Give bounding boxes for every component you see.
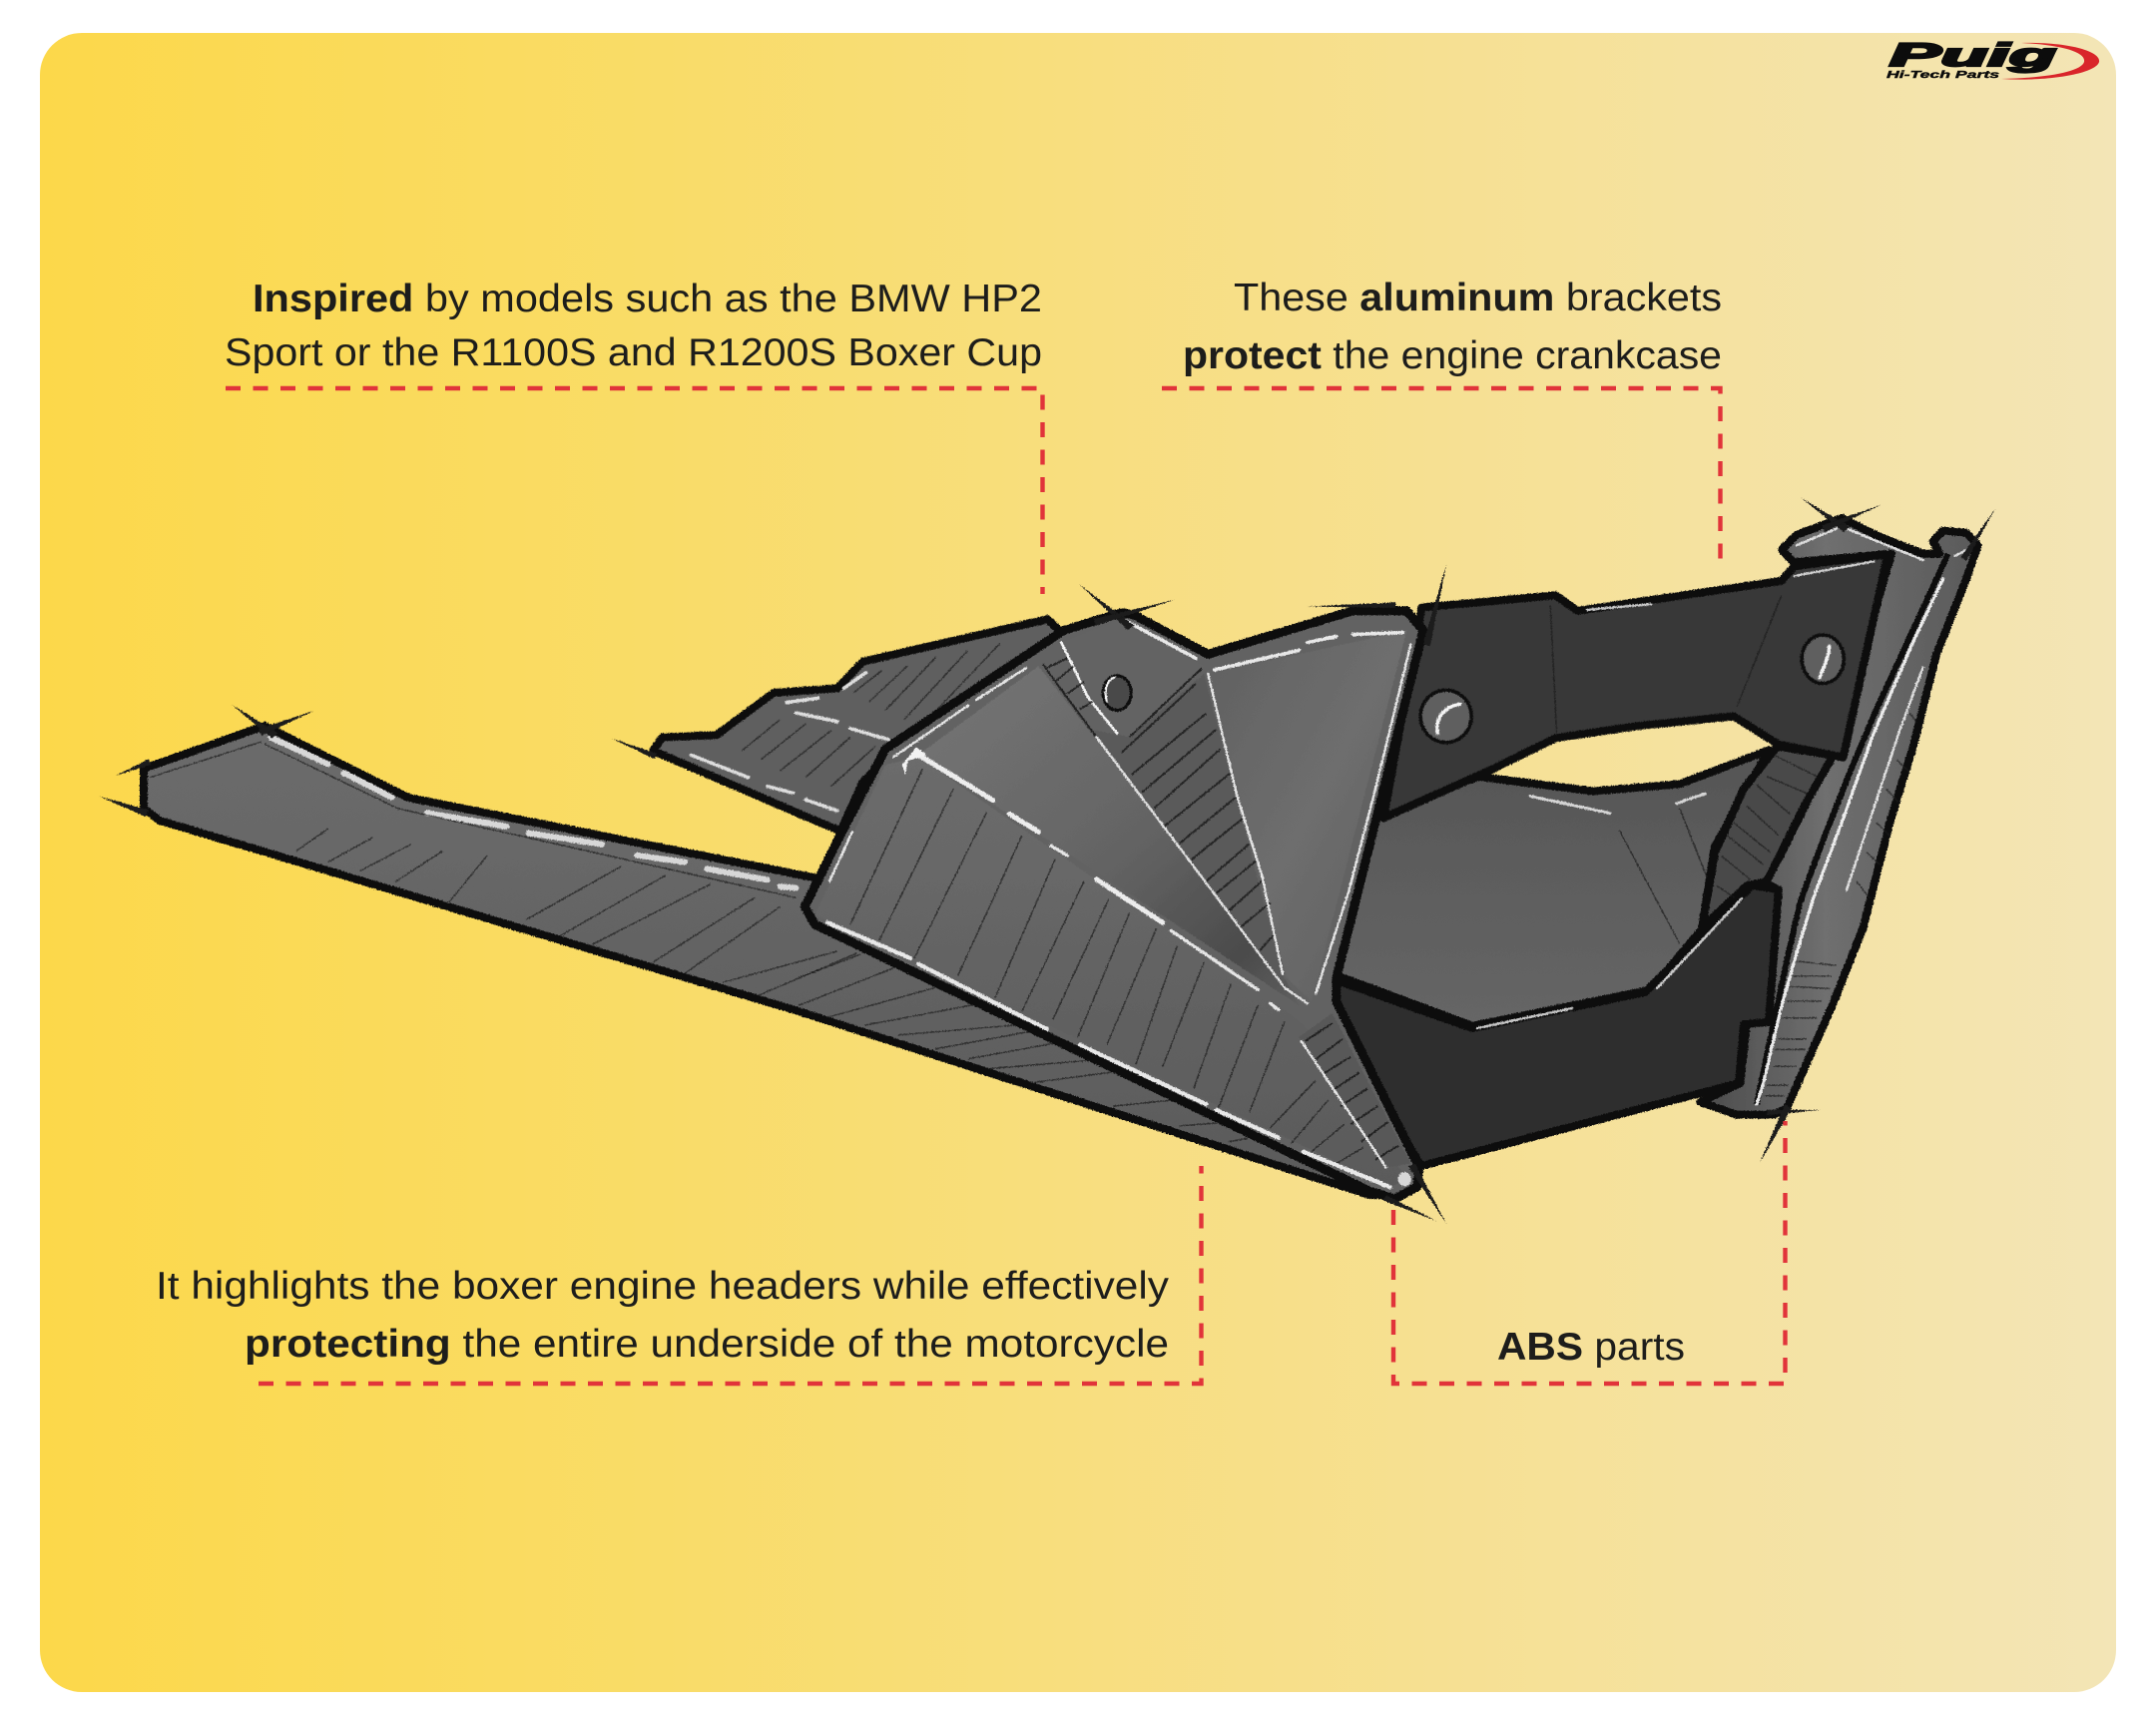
right vertical plate: [1700, 518, 1978, 1115]
boss tab: [1061, 621, 1204, 737]
face: upper left: [918, 666, 1300, 1005]
face: lower right hatched: [1300, 1013, 1410, 1167]
central shell fairing: [805, 611, 1423, 1199]
Puig logo: Hi-Tech Parts: [1886, 69, 1999, 81]
callout: inspired: [225, 278, 1042, 594]
triangle hatch lines: [1047, 658, 1275, 950]
callout: ABS parts: ABS parts: [1497, 1326, 1685, 1369]
callout: aluminum brackets: These aluminum brackets: [1234, 277, 1722, 319]
callout: inspired: Inspired by models such as the BMW HP2: [253, 278, 1042, 320]
callout: inspired: Sport or the R1100S and R1200S Boxer Cup: [225, 331, 1042, 374]
sketch construction strokes: [99, 498, 1995, 1224]
shell highlights: [918, 755, 1163, 922]
fan hatch lines: [850, 769, 1363, 1163]
callout: boxer engine headers: protecting the entire underside of the motorcycle: [245, 1323, 1169, 1366]
highlight spark: [902, 747, 926, 775]
long lower wing: [144, 726, 1402, 1195]
shell outline: [805, 611, 1423, 1199]
Puig logo: [1886, 37, 2099, 81]
inner fairing panel behind bracket: [1301, 750, 1769, 1026]
face: hatched triangle: [1043, 666, 1287, 989]
face: lower fan: [815, 757, 1406, 1187]
callout: aluminum brackets: [1162, 277, 1722, 571]
Puig logo: Puig: [1889, 37, 2056, 73]
bolt left: [1420, 690, 1471, 743]
face edges: [1043, 664, 1308, 1003]
lower right hatch lines: [1306, 1023, 1398, 1159]
hatched inner strip: [1702, 747, 1834, 927]
callout: boxer engine headers: It highlights the boxer engine headers while effectively: [156, 1265, 1170, 1308]
bolt right: [1802, 635, 1844, 684]
shell base: [805, 611, 1423, 1199]
callout: aluminum brackets: protect the engine crankcase: [1183, 334, 1722, 377]
rear small wing: [653, 619, 1063, 831]
face: upper right panel: [1208, 631, 1406, 1001]
callout: ABS parts: [1393, 1121, 1785, 1384]
motorcycle engine spoiler illustration: [99, 498, 1995, 1224]
upper aluminum bracket: [1383, 554, 1887, 818]
tip glint: [1398, 1172, 1411, 1186]
callout: boxer engine headers: [156, 1166, 1202, 1384]
lower black bracket: [1328, 885, 1779, 1166]
